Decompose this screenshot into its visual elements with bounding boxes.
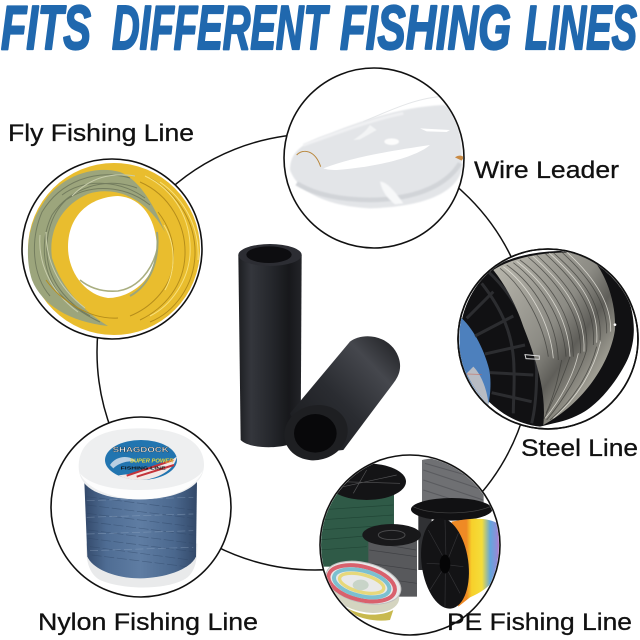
image: yellow and olive coil <box>28 163 200 335</box>
coil centre hole <box>68 196 157 298</box>
label: fly fishing line: Fly Fishing Line <box>8 120 194 147</box>
image: braided line spools <box>317 457 502 621</box>
panel: nylon fishing line <box>51 417 231 597</box>
label: nylon fishing line: Nylon Fishing Line <box>38 609 258 636</box>
panel: fly fishing line <box>22 159 202 339</box>
panel: PE fishing line <box>317 455 502 635</box>
center product: black crimp sleeves <box>238 244 400 467</box>
connecting circle <box>97 134 533 570</box>
image: nylon line spool <box>79 428 204 587</box>
image: steel wire spool <box>460 251 637 428</box>
label: wire leader: Wire Leader <box>474 157 619 184</box>
short sleeve <box>278 336 400 467</box>
spool label: SUPER POWER <box>130 459 173 465</box>
image: clear monofilament coil <box>290 97 464 208</box>
title <box>1 0 637 63</box>
panel: wire leader <box>284 68 464 248</box>
spool label: FISHING LINE <box>121 465 167 471</box>
panel: steel line <box>458 249 640 450</box>
tall sleeve <box>238 244 302 447</box>
spool label: SHAGDOCK <box>113 445 170 454</box>
label: steel line: Steel Line <box>521 435 638 462</box>
label: PE fishing line: PE Fishing Line <box>447 609 632 636</box>
spool label <box>105 440 177 480</box>
